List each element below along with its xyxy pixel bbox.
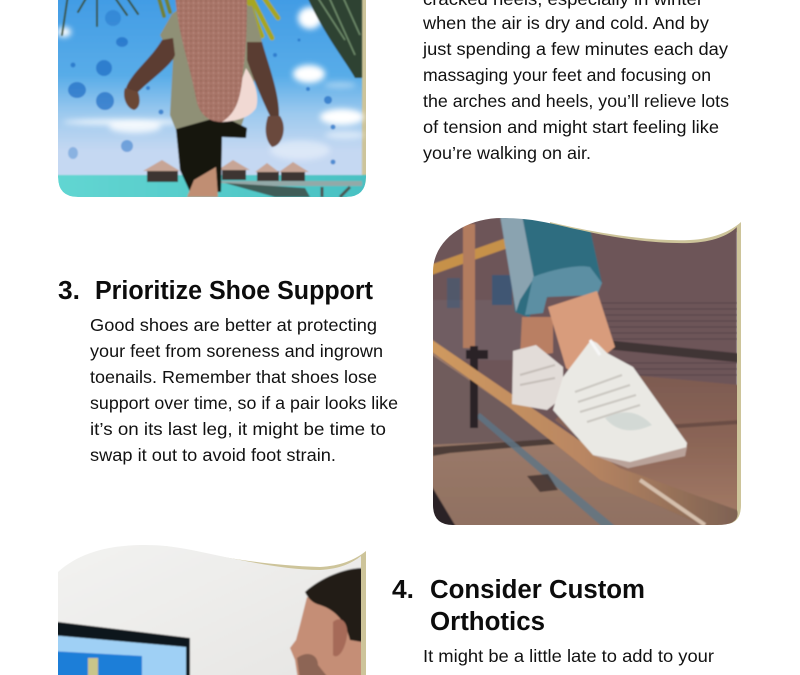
text block: step 2 body copy: the arches and heels, you’ll relieve lots bbox=[423, 91, 729, 111]
overwater huts bbox=[143, 160, 309, 182]
text block: step 3 body copy: your feet from soreness and ingrown bbox=[90, 341, 383, 361]
text block: step 3 body copy: Good shoes are better at protecting bbox=[90, 315, 377, 335]
text block: step 2 body copy: massaging your feet and focusing on bbox=[423, 65, 711, 85]
wire mesh wall bbox=[597, 303, 740, 375]
floor below rail bbox=[433, 353, 702, 525]
legs bbox=[520, 317, 553, 358]
sneakers bbox=[512, 345, 563, 410]
text block: step 2 body copy bbox=[422, 0, 729, 163]
heading: step 3: Prioritize Shoe Support bbox=[95, 277, 373, 305]
text block: step 2 body copy: you’re walking on air. bbox=[423, 143, 591, 163]
text block: step 3 body copy bbox=[90, 315, 398, 465]
jeans bbox=[513, 219, 602, 318]
water bbox=[58, 174, 366, 197]
heading: step 4 bbox=[392, 576, 645, 636]
text block: step 4 body copy: It might be a little late to add to your bbox=[423, 646, 714, 666]
heading: step 4: 4. bbox=[392, 576, 414, 604]
monitor bbox=[50, 621, 190, 675]
text block: step 2 body copy: when the air is dry and cold. And by bbox=[422, 13, 709, 33]
text block: step 3 body copy: swap it out to avoid foot strain. bbox=[90, 445, 336, 465]
palm fronds bbox=[305, 0, 362, 78]
text block: step 3 body copy: toenails. Remember that shoes lose bbox=[90, 367, 377, 387]
man head bbox=[290, 597, 362, 675]
heading: step 4: Consider Custom bbox=[430, 576, 645, 604]
rail under shoes bbox=[425, 335, 740, 530]
photo: white sneakers on a metal rail bbox=[425, 210, 741, 530]
man body bbox=[160, 4, 262, 130]
gold accent: right edge of photo one bbox=[361, 0, 366, 185]
gold accent: wavy top and right edge of photo three bbox=[165, 546, 366, 675]
foot sole overlay bbox=[175, 0, 257, 122]
photo: man on tropical beach with foot sole overlay bbox=[50, 0, 370, 203]
plank floor behind rail bbox=[555, 372, 740, 512]
photo: man looking at a monitor bbox=[50, 535, 366, 675]
heading: step 3: 3. bbox=[58, 277, 80, 305]
text block: step 3 body copy: it’s on its last leg, it might be time to bbox=[90, 419, 386, 439]
text block: step 3 body copy: support over time, so if a pair looks like bbox=[90, 393, 398, 413]
text block: step 2 body copy: just spending a few minutes each day bbox=[422, 39, 728, 59]
upper rail bbox=[425, 243, 507, 272]
pier bbox=[221, 181, 362, 186]
text block: step 2 body copy: of tension and might start feeling like bbox=[423, 117, 719, 137]
gold accent: wavy top and right edge of photo two bbox=[550, 222, 741, 524]
heading: step 4: Orthotics bbox=[430, 608, 545, 636]
